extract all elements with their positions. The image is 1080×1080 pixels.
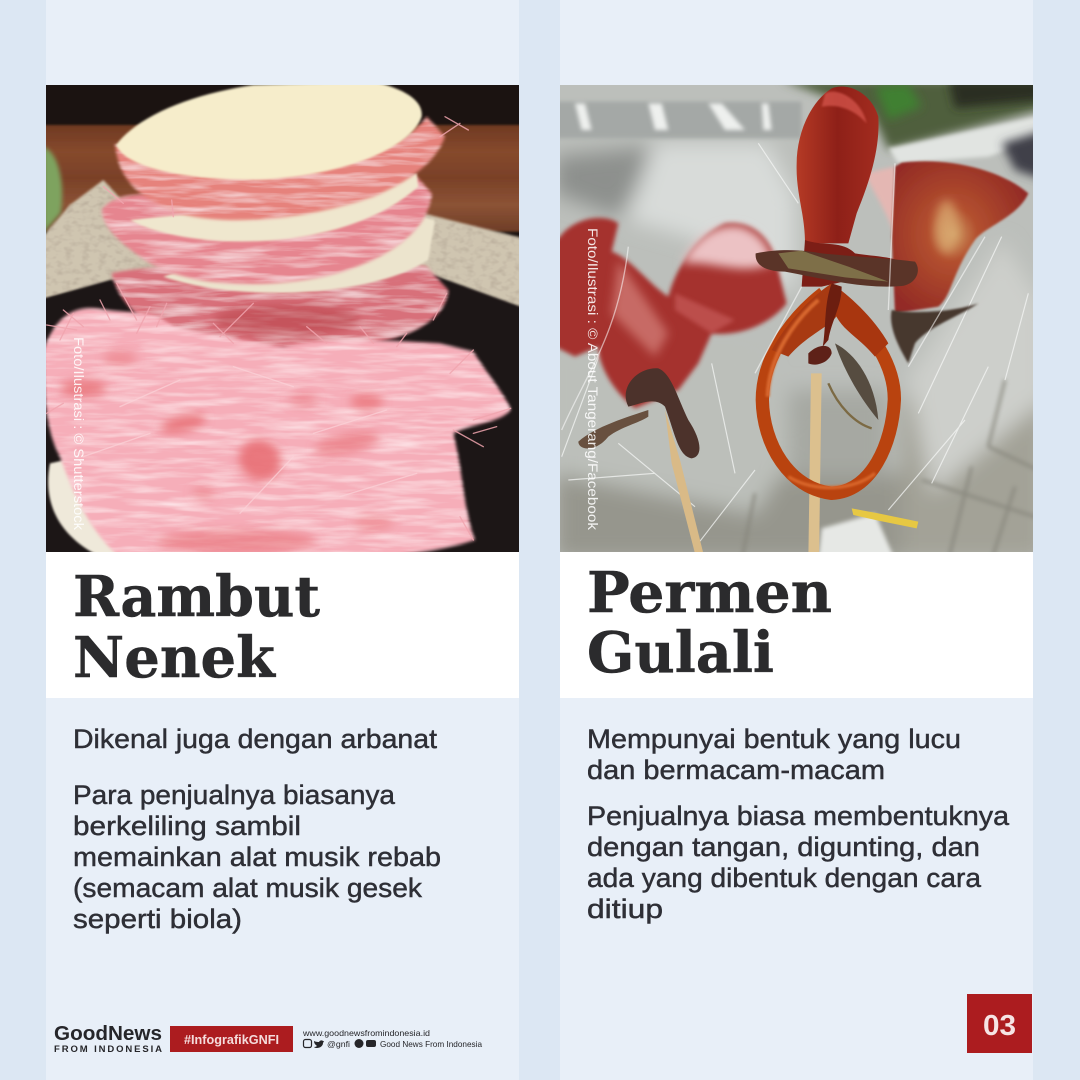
- panel: rambut nenek title: Nenek: [73, 625, 276, 691]
- text block: permen gulali description: Mempunyai bentuk yang lucu: [587, 724, 961, 754]
- panel: rambut nenek title: Rambut: [73, 564, 320, 630]
- panel: rambut nenek title: [46, 552, 519, 698]
- icon: facebook: [354, 1039, 364, 1048]
- icon: youtube: [366, 1040, 376, 1047]
- text block: permen gulali description: dengan tangan, digunting, dan: [587, 832, 980, 862]
- logo: goodnews from indonesia: [54, 1023, 162, 1055]
- page number badge: [967, 994, 1032, 1053]
- text block: rambut nenek description: Dikenal juga dengan arbanat: [73, 724, 438, 754]
- handle: gnfi: @gnfi: [327, 1039, 350, 1049]
- text block: rambut nenek description: seperti biola): [73, 904, 242, 934]
- page number badge: 03: [983, 1010, 1016, 1042]
- text block: permen gulali description: dan bermacam-macam: [587, 755, 885, 785]
- text block: permen gulali description: ada yang dibentuk dengan cara: [587, 863, 982, 893]
- hashtag badge: [170, 1026, 293, 1052]
- text block: permen gulali description: Penjualnya biasa membentuknya: [587, 801, 1010, 831]
- icon: flower candy: [865, 161, 1028, 363]
- panel: permen gulali title: [560, 552, 1033, 698]
- panel: permen gulali title: Gulali: [587, 620, 774, 686]
- icon: twitter: [314, 1040, 324, 1048]
- text block: rambut nenek description: berkeliling sambil: [73, 811, 301, 841]
- website and social handles: www.goodnewsfromindonesia.id: [302, 1028, 430, 1038]
- text block: rambut nenek description: Para penjualnya biasanya: [73, 780, 396, 810]
- panel: permen gulali title: Permen: [587, 560, 832, 626]
- text block: rambut nenek description: [73, 724, 441, 934]
- text block: permen gulali description: [587, 724, 1010, 924]
- hashtag badge: #InfografikGNFI: [184, 1033, 279, 1047]
- icon: rooster candy: [555, 218, 787, 560]
- panel: permen gulali photo: [555, 80, 1045, 560]
- text block: rambut nenek description: memainkan alat musik rebab: [73, 842, 441, 872]
- bag highlights: [562, 163, 985, 430]
- photo credit: about tangerang: Foto/Ilustrasi : © About Tangerang/Facebook: [585, 228, 600, 530]
- logo: goodnews from indonesia: FROM INDONESIA: [54, 1044, 162, 1055]
- icon: central candy: [756, 86, 918, 560]
- logo: goodnews from indonesia: GoodNews: [54, 1023, 162, 1045]
- text block: permen gulali description: ditiup: [587, 894, 663, 924]
- photo credit: shutterstock: Foto/Ilustrasi : © Shutterstock: [71, 337, 86, 530]
- text block: rambut nenek description: (semacam alat musik gesek: [73, 873, 423, 903]
- icon: instagram: [304, 1040, 312, 1048]
- website and social handles: [302, 1028, 482, 1049]
- panel: rambut nenek photo: [40, 80, 530, 560]
- handle: good news from indonesia: Good News From Indonesia: [380, 1039, 482, 1049]
